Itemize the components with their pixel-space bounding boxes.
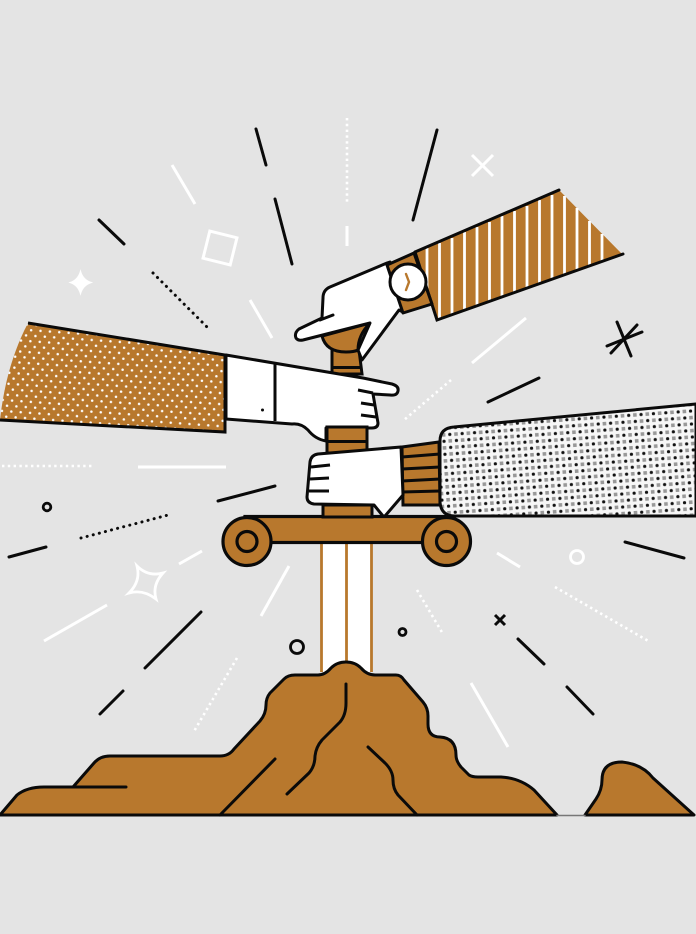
lower sword grip [327,427,367,453]
mound [0,662,694,816]
right arm [307,404,696,516]
icon: white circle [570,550,584,564]
icon: black cross [495,615,505,625]
upper sword grip [332,350,362,374]
icon: white four-point star [70,271,92,294]
right hand [307,447,403,516]
icon: white square outline [203,231,237,265]
icon: white cross [472,155,493,176]
watch face [390,264,426,300]
left sleeve outline [0,323,225,432]
top sleeve with stripes [414,190,623,320]
right cuff [402,442,440,505]
sword guard [223,516,470,566]
watch strap [387,253,432,313]
finger crease [320,315,333,320]
black dotted lines [81,273,207,538]
right hand finger creases [309,465,330,491]
sword blade [321,542,372,672]
icon: small circles [43,503,406,654]
left hand finger creases [358,390,376,417]
white burst lines [44,165,526,747]
icon: outlined sparkle [129,566,163,599]
top hand [295,262,412,360]
white dotted lines [2,118,650,733]
cuff button [261,408,264,412]
pommel [322,323,370,352]
left sleeve dotted [0,323,225,432]
sword neck above guard [323,505,372,517]
cuff seam [274,363,276,421]
left arm [0,323,398,441]
right sleeve dotted [440,404,696,516]
left hand and cuff [226,355,398,441]
top arm [295,190,623,360]
icon: black asterisk [607,322,642,356]
black burst lines [9,129,684,714]
